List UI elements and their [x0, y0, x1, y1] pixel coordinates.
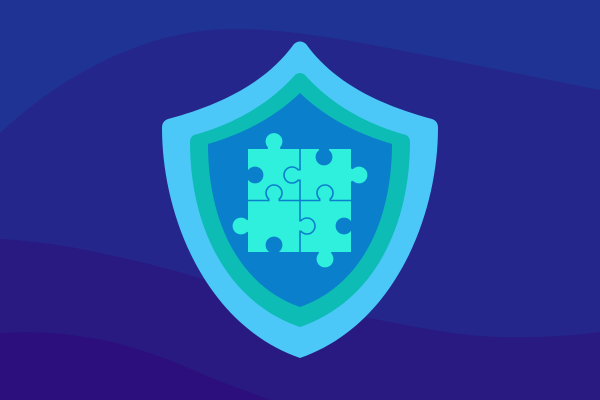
icon: four interlocking puzzle pieces	[233, 133, 367, 267]
shield inner panel	[208, 93, 392, 307]
puzzle seams	[248, 149, 351, 252]
icon: shield	[162, 42, 438, 358]
shield outer layer	[162, 42, 438, 358]
puzzle edge notches	[247, 148, 352, 253]
shield middle layer	[190, 73, 410, 327]
background: bottom wave layer	[0, 332, 270, 400]
background: lower wave layer	[0, 239, 600, 400]
puzzle body with outer knobs	[233, 133, 367, 267]
